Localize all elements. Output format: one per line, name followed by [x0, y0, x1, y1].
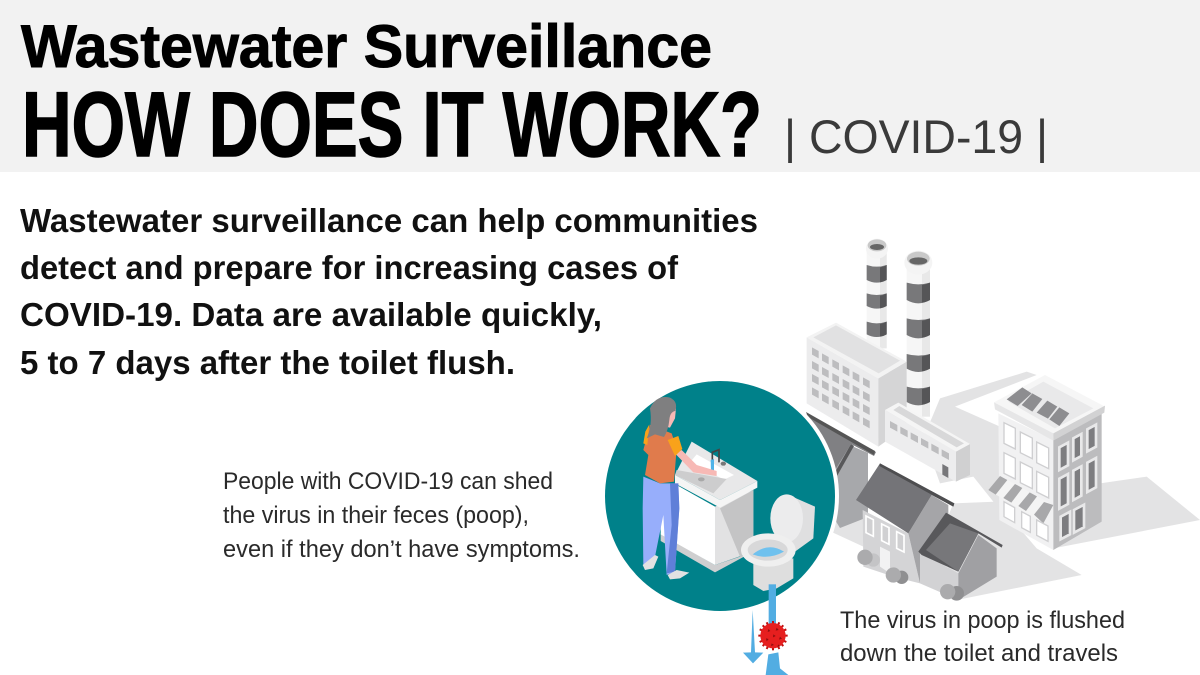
icon: virus	[758, 621, 788, 650]
header band	[0, 0, 1200, 176]
shedding caption	[223, 468, 580, 563]
intro paragraph: Wastewater surveillance can help communities	[20, 202, 758, 239]
front smokestack	[904, 251, 932, 417]
low annex building	[885, 403, 970, 482]
factory	[807, 239, 932, 447]
intro paragraph	[20, 202, 758, 381]
shedding caption: even if they don’t have symptoms.	[223, 536, 580, 563]
ground shadows	[820, 372, 1200, 600]
teal circle	[601, 377, 839, 615]
down arrow	[743, 610, 763, 663]
toilet	[741, 494, 815, 591]
intro paragraph: detect and prepare for increasing cases of	[20, 249, 679, 286]
shrubs	[857, 550, 964, 601]
back house	[806, 412, 876, 528]
awning	[988, 476, 1053, 523]
drain pipe	[766, 584, 788, 675]
bathroom scene	[643, 397, 815, 675]
solar panels	[1007, 387, 1069, 426]
person washing hands	[643, 397, 717, 579]
apartment building	[988, 375, 1105, 550]
right windows	[1059, 425, 1096, 539]
flushing caption	[840, 607, 1125, 667]
shedding caption: the virus in their feces (poop),	[223, 502, 529, 529]
main factory block	[807, 323, 907, 447]
house one	[856, 463, 954, 583]
title line 2: HOW DOES IT WORK?	[22, 74, 762, 176]
shedding caption: People with COVID-19 can shed	[223, 468, 553, 495]
house two	[918, 513, 1003, 600]
flushing caption: down the toilet and travels	[840, 640, 1118, 667]
flushing caption: The virus in poop is flushed	[840, 607, 1125, 634]
intro paragraph: COVID-19. Data are available quickly,	[20, 296, 602, 333]
left windows	[1004, 423, 1049, 498]
back smokestack	[866, 239, 888, 348]
topic tag: | COVID-19 |	[784, 110, 1048, 163]
title line 1: Wastewater Surveillance	[21, 13, 712, 80]
intro paragraph: 5 to 7 days after the toilet flush.	[20, 344, 515, 381]
front houses	[856, 463, 1003, 601]
sink cabinet	[661, 442, 757, 572]
